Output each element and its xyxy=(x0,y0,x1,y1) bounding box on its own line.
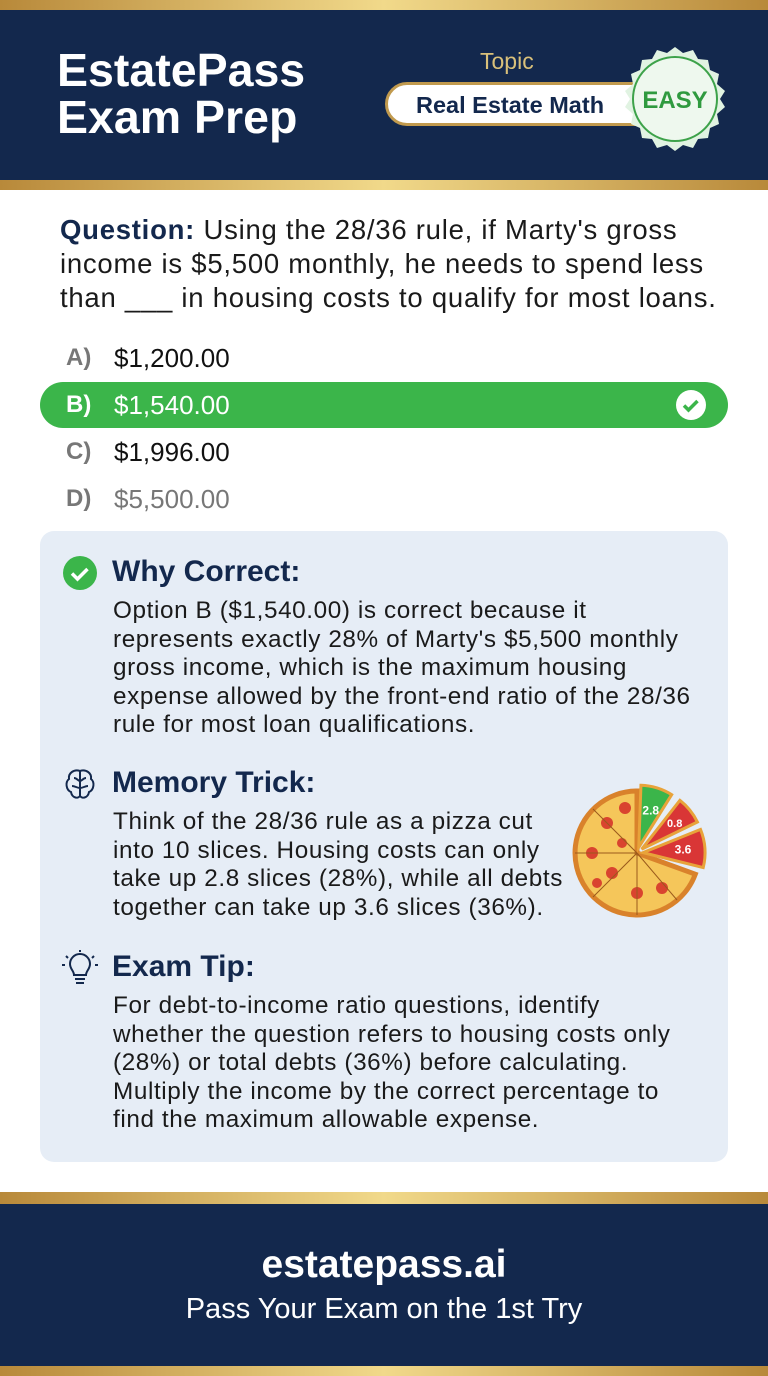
section: exam tip: Multiply the income by the correct percentage to xyxy=(113,1078,659,1104)
title: Exam Prep xyxy=(57,91,297,143)
option D: D) xyxy=(66,485,91,512)
icon: pizza chart: 2.8 xyxy=(642,803,659,817)
section: exam tip: (28%) or total debts (36%) before calculating. xyxy=(113,1049,628,1076)
title xyxy=(57,44,305,143)
topic pill: Real Estate Math xyxy=(416,92,604,118)
icon: pizza chart: 0.8 xyxy=(667,818,682,830)
badge: easy xyxy=(625,47,725,151)
section: memory trick: take up 2.8 slices (28%), while all debts xyxy=(113,865,563,892)
topic pill xyxy=(385,82,655,126)
question: than ___ in housing costs to qualify for most loans. xyxy=(60,282,717,313)
section: memory trick xyxy=(66,766,563,920)
footer tagline: Pass Your Exam on the 1st Try xyxy=(186,1293,582,1325)
section: exam tip: For debt-to-income ratio questions, identify xyxy=(113,992,600,1019)
section: memory trick: Memory Trick: xyxy=(112,766,315,799)
section: exam tip: find the maximum allowable expense. xyxy=(113,1106,539,1133)
question: income is $5,500 monthly, he needs to spend less xyxy=(60,248,704,279)
section: why correct xyxy=(63,555,691,738)
section: memory trick: together can take up 3.6 slices (36%). xyxy=(113,894,544,920)
option B correct: $1,540.00 xyxy=(114,390,230,420)
option A: $1,200.00 xyxy=(114,342,230,372)
section: why correct: represents exactly 28% of Marty's $5,500 monthly xyxy=(113,626,679,652)
badge: easy: EASY xyxy=(642,87,708,114)
question: Question: Using the 28/36 rule, if Marty's gross xyxy=(60,214,677,245)
section: why correct: rule for most loan qualifications. xyxy=(113,711,475,738)
section: why correct: Option B ($1,540.00) is correct because it xyxy=(113,597,587,624)
option C: $1,996.00 xyxy=(114,436,230,466)
section: why correct: Why Correct: xyxy=(112,555,300,588)
option B correct: B) xyxy=(66,391,91,418)
option D: $5,500.00 xyxy=(114,484,230,514)
footer url: estatepass.ai xyxy=(262,1243,506,1286)
option A: A) xyxy=(66,344,91,371)
section: exam tip: Exam Tip: xyxy=(112,950,255,983)
icon: pizza chart: 3.6 xyxy=(675,843,692,857)
topic label: Topic xyxy=(480,48,534,74)
footer band xyxy=(0,1192,768,1376)
option C: C) xyxy=(66,438,91,465)
section: why correct: gross income, which is the maximum housing xyxy=(113,654,627,681)
section: memory trick: Think of the 28/36 rule as a pizza cut xyxy=(113,808,533,835)
section: memory trick: into 10 slices. Housing costs can only xyxy=(113,836,540,864)
option B correct xyxy=(40,382,728,428)
title: EstatePass xyxy=(57,44,305,96)
section: exam tip xyxy=(62,950,670,1133)
icon: pizza chart xyxy=(572,784,707,918)
section: exam tip: whether the question refers to housing costs only xyxy=(113,1020,670,1048)
question xyxy=(60,214,717,313)
header band xyxy=(0,0,768,190)
section: why correct: expense allowed by the front-end ratio of the 28/36 xyxy=(113,682,691,710)
explanation panel xyxy=(40,531,728,1162)
